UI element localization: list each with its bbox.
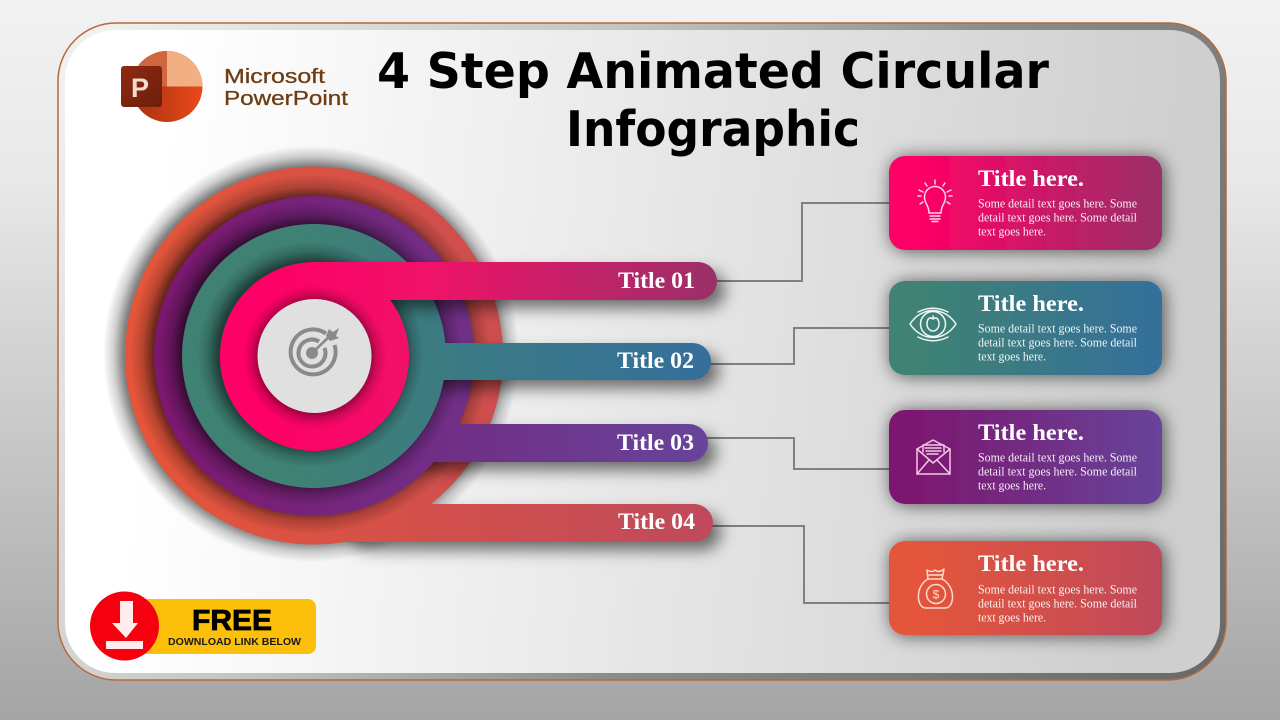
download badge xyxy=(90,592,316,660)
card 2 detail text xyxy=(978,322,1138,364)
download badge: DOWNLOAD LINK BELOW xyxy=(168,636,301,648)
ring 3: purple with bar xyxy=(130,174,708,534)
circular diagram xyxy=(103,146,717,562)
card 3 detail text: detail text goes here. Some detail xyxy=(978,464,1138,478)
card 2 detail text: text goes here. xyxy=(978,350,1046,364)
card 3 detail text xyxy=(978,450,1138,492)
card 2 xyxy=(889,281,1162,375)
pill labels: Title 01 xyxy=(618,268,695,293)
card 2: Title here. xyxy=(978,291,1084,317)
title: Infographic xyxy=(566,101,860,158)
title xyxy=(377,43,1050,158)
center disc xyxy=(242,285,386,429)
card 1 detail text: text goes here. xyxy=(978,224,1046,238)
title: 4 Step Animated Circular xyxy=(377,43,1050,100)
logo text: Microsoft xyxy=(224,66,326,88)
logo text: PowerPoint xyxy=(224,88,349,110)
icon: PowerPoint: P xyxy=(131,73,149,103)
card 3 detail text: text goes here. xyxy=(978,478,1046,492)
card 2 detail text: Some detail text goes here. Some xyxy=(978,322,1137,336)
card 3 xyxy=(889,410,1162,504)
icon: PowerPoint xyxy=(121,51,202,122)
card 1 detail text xyxy=(978,196,1138,238)
card 4 detail text: text goes here. xyxy=(978,610,1046,624)
ring 2: green with bar xyxy=(158,202,711,506)
pill labels: Title 04 xyxy=(618,509,696,534)
card 3 detail text: Some detail text goes here. Some xyxy=(978,450,1137,464)
icon: target xyxy=(291,328,339,374)
icon: money bag: $ xyxy=(933,588,940,602)
download badge: FREE xyxy=(192,605,272,637)
logo text xyxy=(224,66,349,110)
pill labels: Title 03 xyxy=(617,430,694,455)
card 4 xyxy=(889,541,1162,635)
ring 1: pink with bar xyxy=(198,242,717,468)
icon: open envelope xyxy=(917,440,950,474)
card 1 detail text: detail text goes here. Some detail xyxy=(978,210,1138,224)
card 3: Title here. xyxy=(978,420,1084,446)
card 1 detail text: Some detail text goes here. Some xyxy=(978,196,1137,210)
pill labels: Title 02 xyxy=(617,348,694,373)
card 4 detail text: detail text goes here. Some detail xyxy=(978,596,1138,610)
card 1 xyxy=(889,156,1162,250)
ring 4: red with bar xyxy=(103,146,713,562)
icon: download arrow xyxy=(106,601,143,649)
icon: light bulb xyxy=(918,180,952,222)
logo: Microsoft PowerPoint xyxy=(121,51,349,122)
connector lines xyxy=(706,203,890,603)
card 4 detail text: Some detail text goes here. Some xyxy=(978,582,1137,596)
icon: money bag xyxy=(918,569,953,608)
card 1: Title here. xyxy=(978,166,1084,192)
card 4: Title here. xyxy=(978,551,1084,577)
pill labels xyxy=(617,268,696,534)
card 2 detail text: detail text goes here. Some detail xyxy=(978,336,1138,350)
card 4 detail text xyxy=(978,582,1138,624)
icon: eye xyxy=(910,308,956,341)
